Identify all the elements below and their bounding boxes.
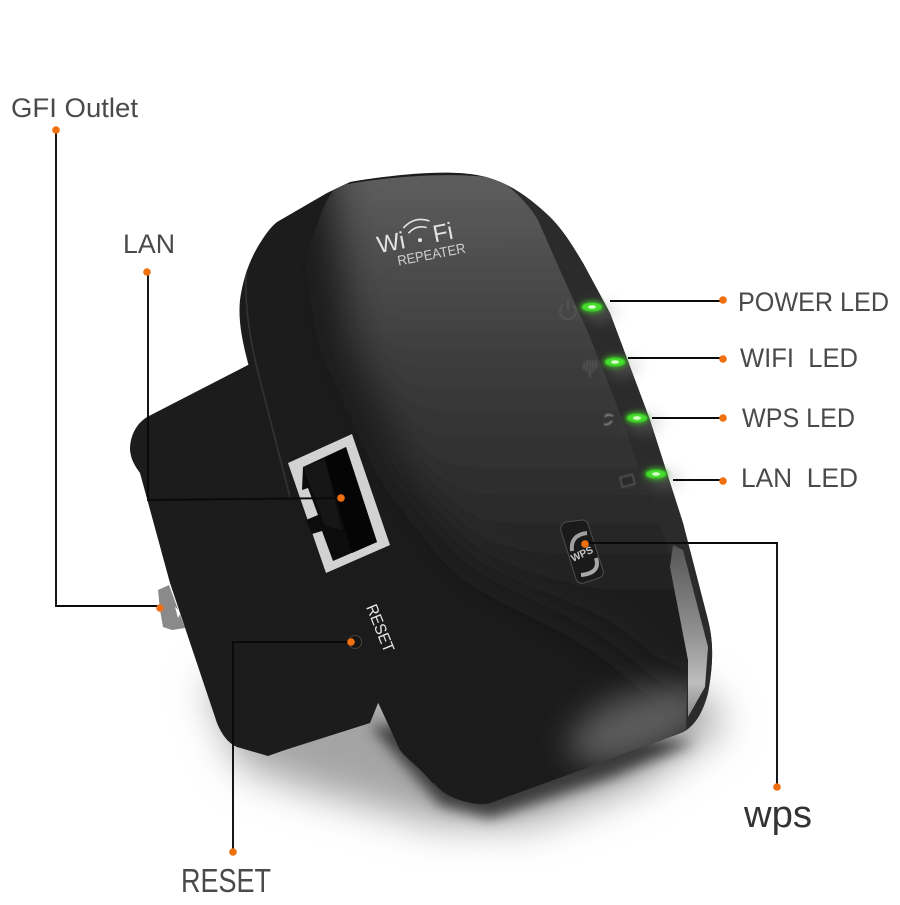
- Wi-Fi repeater logo: Wi: [375, 227, 407, 259]
- Wi-Fi repeater logo: REPEATER: [396, 240, 467, 269]
- WPS button: WPS: [569, 544, 595, 565]
- RESET printed label: RESET: [362, 602, 397, 655]
- LED: wifi: [603, 356, 641, 376]
- right side shell: [482, 176, 712, 737]
- leader: WPS: [585, 543, 777, 787]
- leader: wifi LED: [628, 357, 723, 359]
- label: WPS LED: WPS LED: [742, 403, 855, 433]
- leader: RESET: [233, 642, 351, 852]
- label: RESET: RESET: [181, 862, 271, 899]
- label: POWER LED: POWER LED: [738, 287, 889, 317]
- label: WIFI LED: WIFI LED: [740, 343, 858, 373]
- icon: power: [560, 299, 576, 319]
- main body: [240, 172, 712, 804]
- grey side highlight: [670, 545, 708, 717]
- leader: wps LED: [652, 417, 723, 419]
- icon: antenna: [584, 360, 596, 378]
- dot: reset hole: [347, 638, 355, 646]
- dot: wps bottom: [773, 783, 781, 791]
- icon: wps mini arrows: [604, 415, 613, 425]
- plug housing (rear body): [130, 360, 420, 756]
- label: wps: wps: [743, 794, 812, 836]
- dot: wifi led: [719, 355, 727, 363]
- dot: lan led: [719, 477, 727, 485]
- leader: GFI outlet: [56, 130, 160, 606]
- LED: lan: [644, 468, 682, 488]
- dot: GFI prong: [156, 604, 164, 612]
- dot: power led: [719, 296, 727, 304]
- front face panel: [290, 175, 688, 804]
- icon: lan mini: [620, 474, 635, 487]
- LED: wps: [625, 412, 663, 432]
- dot: LAN top: [143, 268, 151, 276]
- label: LAN: LAN: [123, 229, 175, 259]
- dot: wps button: [581, 540, 589, 548]
- body shell seam: [246, 262, 440, 790]
- dot: wps led: [719, 414, 727, 422]
- reset pinhole: [348, 636, 362, 648]
- dot: reset bottom: [229, 848, 237, 856]
- label: GFI Outlet: GFI Outlet: [11, 93, 138, 123]
- ethernet LAN port: [288, 434, 390, 573]
- dot: GFI top: [52, 126, 60, 134]
- leader: LAN: [148, 272, 341, 500]
- plug prong: [158, 585, 185, 630]
- leader: power LED: [610, 300, 723, 302]
- dot: LAN port: [337, 494, 345, 502]
- panel icons: [560, 299, 635, 487]
- WPS button: [561, 520, 603, 583]
- callout lines and dots: [56, 130, 777, 852]
- LED: power: [580, 302, 618, 321]
- leader: lan LED: [673, 479, 723, 481]
- Wi-Fi repeater logo: Fi: [431, 218, 455, 248]
- label: LAN LED: LAN LED: [741, 463, 858, 493]
- ground shadow: [205, 680, 725, 825]
- Wi-Fi repeater logo: [374, 212, 467, 272]
